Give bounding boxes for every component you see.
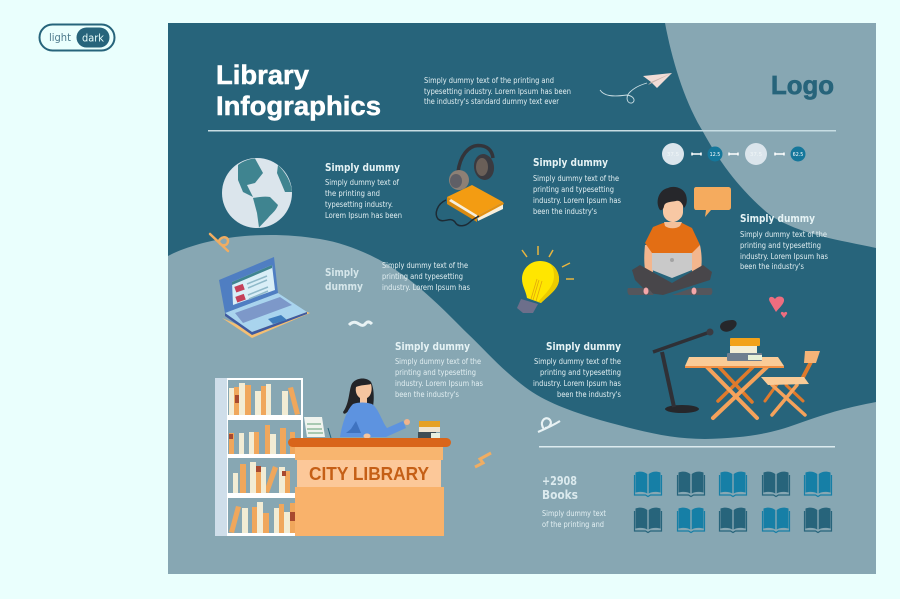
text block: person: Simply dummy text of the <box>740 230 827 239</box>
icon: bookshelf <box>215 378 303 536</box>
text block: headphones: Simply dummy <box>533 156 608 169</box>
text block: person <box>740 212 828 271</box>
text block: desk <box>533 340 621 399</box>
intro text: Simply dummy text of the printing and <box>424 76 554 85</box>
icon: white squiggle <box>349 322 372 325</box>
lower divider <box>539 446 835 448</box>
toggle: light dark: dark <box>82 32 105 44</box>
text block: library: Simply dummy <box>395 340 470 353</box>
toggle: light dark: light <box>49 31 72 44</box>
title: Library <box>216 60 309 90</box>
text block: laptop: Simply dummy text of the <box>382 261 468 270</box>
scale indicators <box>662 143 806 165</box>
text block: globe: Simply dummy <box>325 161 400 174</box>
text block: person: printing and typesetting <box>740 241 821 250</box>
text block: headphones: Simply dummy text of the <box>533 174 619 183</box>
text block: book count: Books <box>542 488 578 502</box>
logo: Logo <box>771 70 834 100</box>
text block: book count <box>542 474 606 529</box>
text block: laptop: industry. Lorem Ipsum has <box>382 283 470 292</box>
panel: dark wave shape <box>168 23 876 439</box>
text block: library: industry. Lorem Ipsum has <box>395 379 483 388</box>
icon: globe <box>222 158 292 228</box>
icon: stacked books on counter <box>418 421 440 439</box>
text block: laptop: dummy <box>325 280 363 293</box>
text block: library: been the industry's <box>395 390 459 399</box>
icon: orange zigzag <box>475 453 491 467</box>
text block: headphones <box>533 156 621 216</box>
text block: laptop <box>325 261 470 293</box>
text block: globe: the printing and <box>325 189 380 198</box>
intro text <box>424 76 571 106</box>
intro text: typesetting industry. Lorem Ipsum has been <box>424 87 571 96</box>
icon grid: books <box>634 472 832 532</box>
text block: book count: Simply dummy text <box>542 509 606 518</box>
text block: person: Simply dummy <box>740 212 815 225</box>
text block: globe <box>325 161 402 220</box>
panel: background <box>168 23 876 574</box>
text block: globe: typesetting industry. <box>325 200 393 209</box>
text block: headphones: printing and typesetting <box>533 185 614 194</box>
text block: laptop: Simply <box>325 266 359 279</box>
toggle: light dark <box>40 24 114 50</box>
text block: person: industry. Lorem Ipsum has <box>740 252 828 261</box>
text block: globe: Lorem Ipsum has been <box>325 211 402 220</box>
library counter: CITY LIBRARY <box>309 464 429 484</box>
icon: stacked books on desk <box>727 338 762 361</box>
intro text: the industry's standard dummy text ever <box>424 97 560 106</box>
icon: headphones and book <box>436 146 504 226</box>
text block: desk: Simply dummy <box>546 340 621 353</box>
text block: library <box>395 340 483 399</box>
icon: paper plane <box>600 73 672 103</box>
library counter <box>288 438 451 536</box>
icon: light bulb <box>517 246 574 313</box>
icon: librarian <box>340 379 410 438</box>
icon: person with laptop <box>627 187 731 295</box>
text block: desk: been the industry's <box>557 390 621 399</box>
text block: globe: Simply dummy text of <box>325 178 399 187</box>
text block: desk: industry. Lorem Ipsum has <box>533 379 621 388</box>
text block: person: been the industry's <box>740 262 804 271</box>
title <box>216 60 381 121</box>
text block: laptop: printing and typesetting <box>382 272 463 281</box>
scale indicators: 12.5 <box>710 152 720 158</box>
title: Infographics <box>216 91 381 121</box>
text block: desk: Simply dummy text of the <box>534 357 621 366</box>
text block: library: printing and typesetting <box>395 368 476 377</box>
icon: monitor <box>304 417 331 438</box>
icon: laptop <box>219 257 310 338</box>
text block: library: Simply dummy text of the <box>395 357 481 366</box>
header divider <box>208 130 836 132</box>
scale indicators: 37.5 <box>750 152 763 158</box>
text block: headphones: industry. Lorem Ipsum has <box>533 196 621 205</box>
text block: desk: printing and typesetting <box>540 368 621 377</box>
text block: book count: of the printing and <box>542 520 604 529</box>
text block: headphones: been the industry's <box>533 207 597 216</box>
text block: book count: +2908 <box>542 474 577 488</box>
icon: white loop <box>538 418 560 432</box>
icon: desk lamp <box>653 320 737 413</box>
icon: desk and chair <box>685 351 820 418</box>
scale indicators: 37.5 <box>667 152 680 158</box>
icon: hearts <box>769 297 787 318</box>
icon: orange squiggle <box>210 234 228 251</box>
scale indicators: 62.5 <box>793 152 803 158</box>
